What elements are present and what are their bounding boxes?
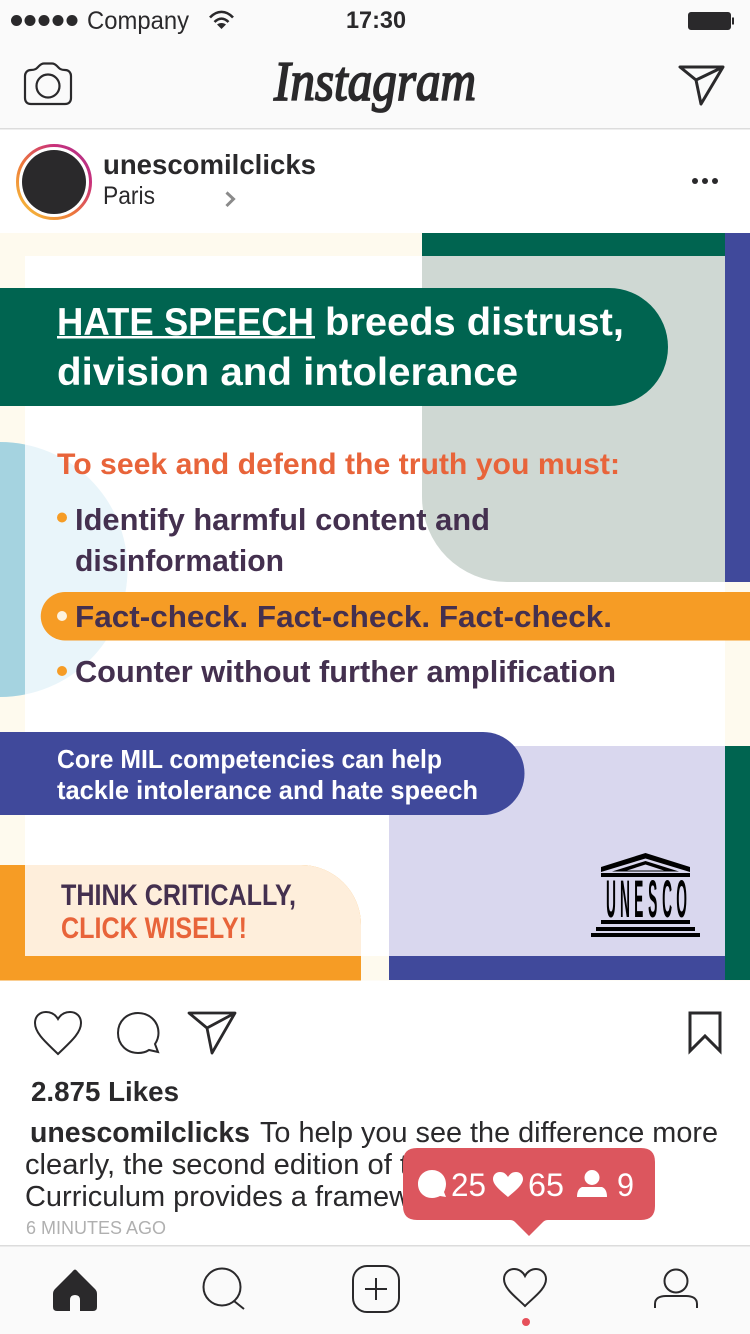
- logo: Instagram: Instagram: [273, 51, 476, 113]
- bottom navigation: [0, 1245, 750, 1334]
- bullet list: Identify harmful content and: [75, 502, 490, 537]
- icon: add post: [353, 1266, 399, 1312]
- notification dot: [522, 1318, 530, 1326]
- battery: [688, 12, 734, 30]
- bullet list: disinformation: [75, 543, 284, 578]
- icon: direct message: [680, 67, 723, 104]
- follower number: 9: [617, 1167, 634, 1203]
- slogan panel: CLICK WISELY!: [61, 912, 247, 945]
- bullet list: Counter without further amplification: [75, 654, 616, 689]
- panel: left circle: [0, 442, 128, 697]
- icon: comment: [118, 1013, 158, 1053]
- infographic image: [0, 233, 750, 980]
- icon: home: [53, 1270, 97, 1311]
- heading text: breeds distrust,: [325, 301, 624, 344]
- icon: comment count: [418, 1170, 446, 1198]
- bullet list: Fact-check. Fact-check. Fact-check.: [75, 599, 612, 634]
- caption: unescomilclicks: [30, 1117, 250, 1149]
- heading banner: [0, 288, 668, 406]
- caption: clearly, the second edition of t: [25, 1149, 408, 1181]
- account name: unescomilclicks: [103, 149, 316, 180]
- MIL callout: Core MIL competencies can help: [57, 744, 442, 774]
- logo: UNESCO: [591, 853, 700, 937]
- like number: 65: [528, 1167, 564, 1203]
- heading text: division and intolerance: [57, 351, 518, 394]
- bullet list: [57, 502, 616, 689]
- timestamp: 6 MINUTES AGO: [26, 1218, 166, 1238]
- panel: top right grey block: [422, 233, 750, 582]
- heading text: HATE SPEECH: [57, 301, 314, 344]
- icon: share: [189, 1013, 235, 1053]
- icon: bookmark: [690, 1013, 720, 1051]
- notification badge: [403, 1148, 655, 1236]
- icon: camera: [25, 64, 71, 104]
- signal dots: [11, 15, 78, 26]
- icon: follower count: [577, 1170, 607, 1197]
- caption: To help you see the difference more: [260, 1117, 718, 1149]
- post actions: [35, 1012, 720, 1054]
- icon: heart count: [493, 1172, 523, 1197]
- icon: activity heart: [504, 1269, 546, 1306]
- slogan panel: [0, 865, 361, 980]
- icon: search: [204, 1268, 244, 1309]
- wifi icon: [210, 12, 233, 29]
- heading text: [57, 301, 624, 394]
- comment number: 25: [451, 1167, 486, 1203]
- clock: 17:30: [346, 7, 406, 34]
- post header: [18, 146, 718, 218]
- icon: profile: [655, 1270, 697, 1308]
- top app bar: [0, 0, 750, 130]
- MIL callout: tackle intolerance and hate speech: [57, 775, 478, 805]
- caption: [25, 1117, 718, 1213]
- likes count: 2.875 Likes: [31, 1076, 179, 1107]
- MIL callout: [0, 732, 524, 815]
- location: Paris: [103, 182, 155, 210]
- logo: UNESCO: UNESCO: [606, 870, 687, 929]
- avatar: [18, 146, 90, 218]
- orange highlight band: [41, 592, 750, 640]
- icon: chevron: [226, 192, 234, 206]
- carrier name: Company: [87, 7, 189, 35]
- icon: like: [35, 1012, 81, 1054]
- caption: Curriculum provides a framew: [25, 1181, 410, 1213]
- panel: lavender block: [389, 746, 750, 980]
- icon: more menu: [692, 178, 718, 184]
- subheading: To seek and defend the truth you must:: [57, 448, 620, 481]
- slogan panel: THINK CRITICALLY,: [61, 879, 296, 912]
